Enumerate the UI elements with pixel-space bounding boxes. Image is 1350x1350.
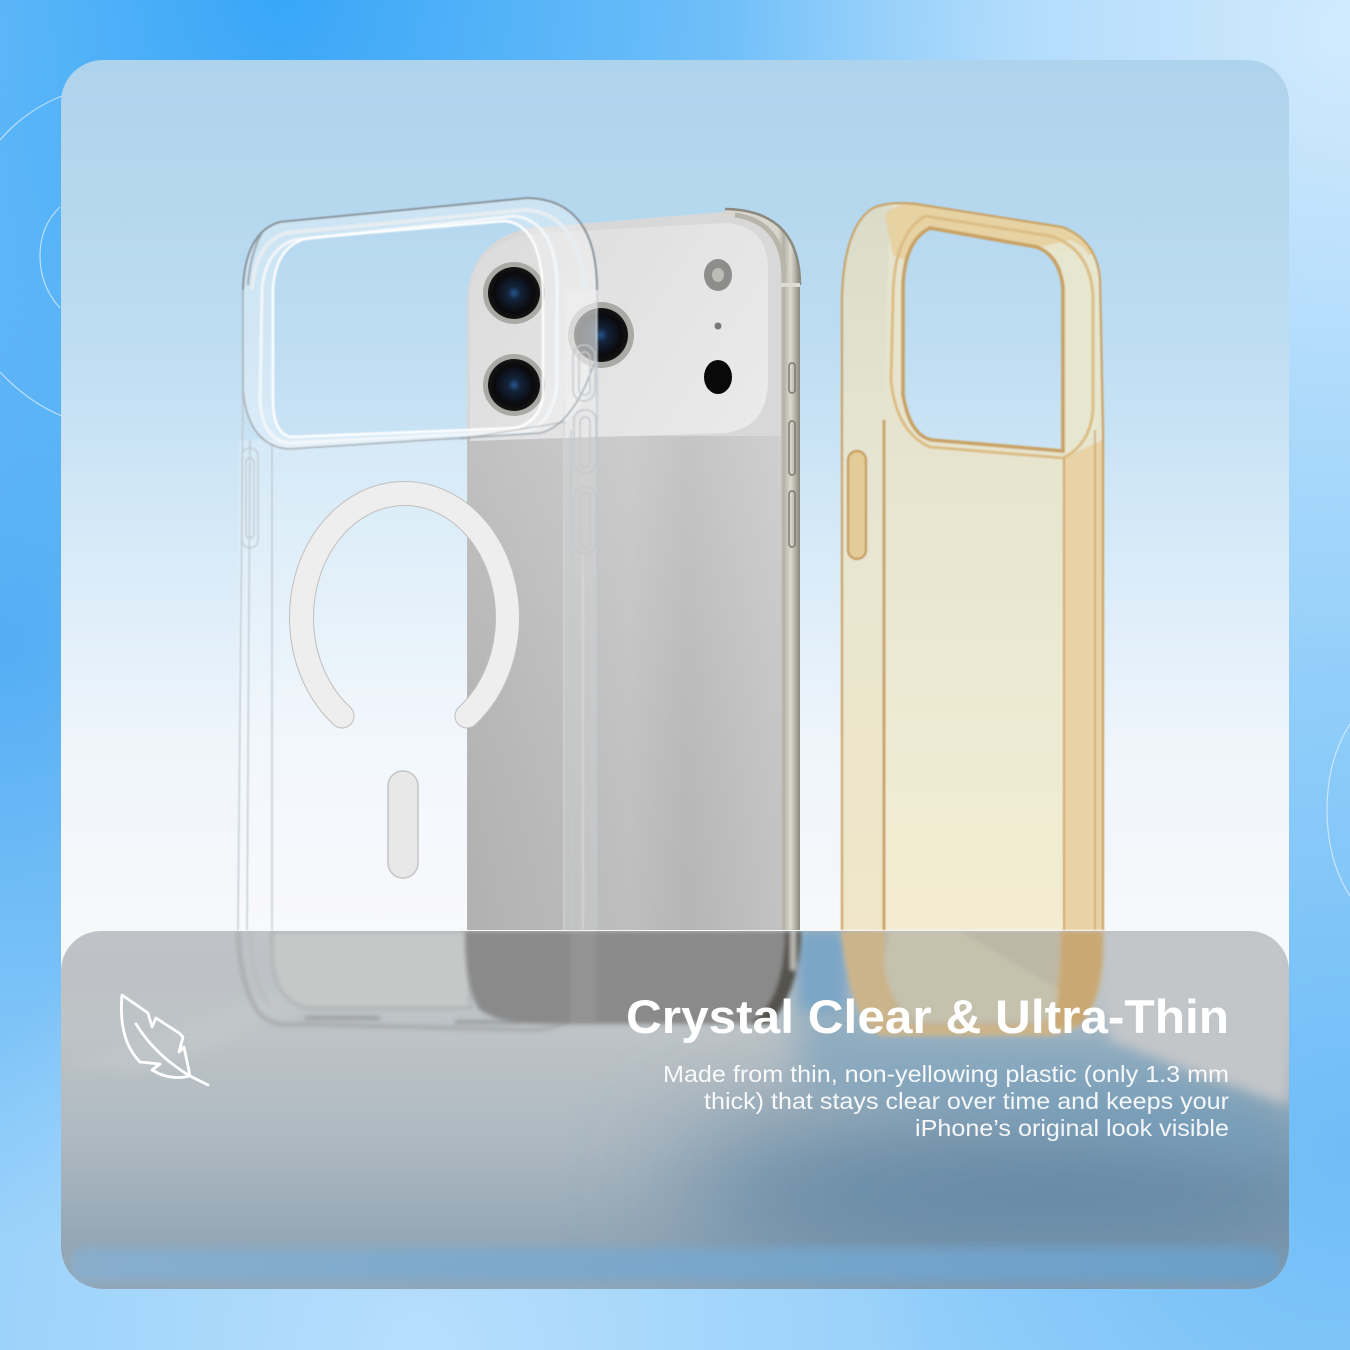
description text: iPhone’s original look visible <box>915 1115 1229 1141</box>
phone titanium frame <box>725 209 800 930</box>
panel: bottom frosted text card <box>61 931 1350 1289</box>
faint diagonal light streak left <box>61 955 420 1075</box>
magsafe ring <box>302 493 507 716</box>
description text: thick) that stays clear over time and keeps your <box>704 1088 1229 1114</box>
bottom blue band <box>72 1248 1278 1282</box>
blue glow right <box>670 1110 1350 1270</box>
amber case reflection <box>841 931 1103 1036</box>
lens two <box>483 354 545 416</box>
magsafe alignment pill <box>388 771 418 878</box>
wall wash over third lens <box>568 302 597 366</box>
phone body <box>467 436 783 930</box>
camera plateau <box>470 223 768 441</box>
case walls <box>238 290 597 930</box>
left case button <box>242 448 258 548</box>
description text <box>663 1061 1229 1141</box>
amber top band <box>885 204 1093 260</box>
antenna band <box>781 283 800 287</box>
phone back shell behind plateau <box>467 211 781 441</box>
amber left strip <box>842 205 892 930</box>
product photo: amber yellowed case <box>842 203 1104 930</box>
amber right strip <box>1063 440 1103 930</box>
lidar sensor <box>704 360 732 394</box>
amber case fill <box>884 204 1102 930</box>
microphone dot <box>714 322 722 330</box>
amber case button <box>848 451 866 559</box>
phone side buttons <box>789 363 795 547</box>
lens three <box>568 302 634 368</box>
right wall sheen <box>565 290 597 930</box>
description text: Made from thin, non-yellowing plastic (only 1.3 mm <box>663 1061 1229 1087</box>
pale band top right <box>1100 931 1289 1105</box>
diagonal blue light wedge <box>780 931 1288 1142</box>
product photo: silver phone <box>467 209 800 930</box>
case interior tint <box>273 440 466 564</box>
silver phone reflection <box>465 931 801 1024</box>
heading: Crystal Clear & Ultra-Thin <box>626 990 1229 1043</box>
right case buttons <box>572 344 597 498</box>
amber right pale rim <box>1041 240 1088 254</box>
amber rim lines <box>842 203 1103 930</box>
left wall sheen <box>240 440 271 604</box>
clear case reflection <box>238 931 597 1030</box>
sharp blue gap between phones <box>798 931 845 1010</box>
lens one <box>483 262 545 324</box>
icon: feather <box>121 995 208 1085</box>
product photo: clear case <box>238 198 597 930</box>
camera cutout rim lines <box>243 198 597 449</box>
camera cutout ring sheen <box>243 198 597 449</box>
flash <box>704 259 732 291</box>
